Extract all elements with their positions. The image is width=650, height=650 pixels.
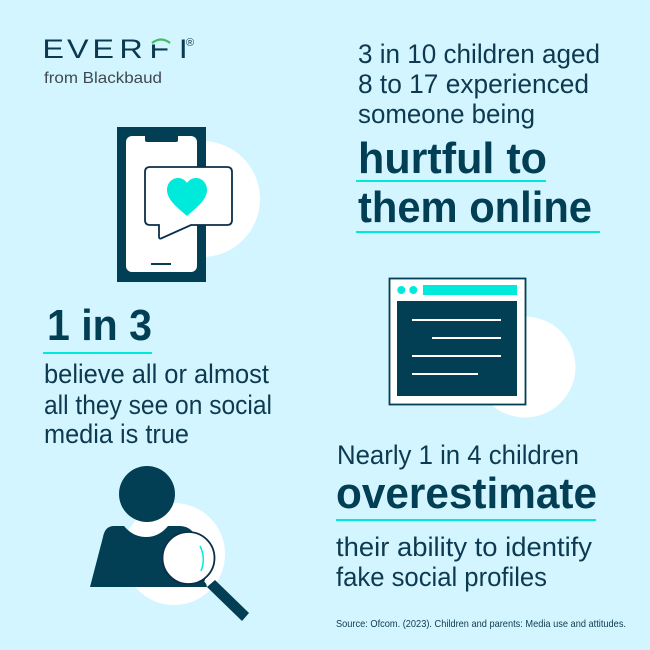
logo: EVERFI from Blackbaud: from Blackbaud: [44, 70, 162, 87]
text block: hurtful online statistic: hurtful to: [358, 134, 547, 183]
text block: hurtful online statistic: 3 in 10 children aged: [358, 39, 600, 69]
text block: 1 in 3 statistic: [43, 301, 272, 449]
logo: EVERFI from Blackbaud: EVERFI: [42, 34, 188, 64]
text block: 1 in 3 statistic: all they see on social: [44, 390, 272, 420]
text block: 1 in 3 statistic: media is true: [44, 419, 189, 449]
icon: person with magnifying glass: [90, 466, 249, 621]
text block: overestimate statistic: [336, 440, 597, 592]
text block: 1 in 3 statistic: 1 in 3: [47, 301, 152, 350]
text block: overestimate statistic: fake social profiles: [336, 562, 547, 592]
text block: 1 in 3 statistic: believe all or almost: [44, 359, 269, 389]
icon: browser window: [390, 278, 576, 418]
icon: phone with heart message: [117, 127, 260, 282]
text block: hurtful online statistic: them online: [358, 183, 592, 232]
logo: EVERFI from Blackbaud: [42, 34, 194, 87]
text block: overestimate statistic: Nearly 1 in 4 children: [337, 440, 579, 470]
text block: hurtful online statistic: someone being: [358, 99, 535, 129]
logo: EVERFI from Blackbaud: ®: [186, 37, 194, 49]
text block: overestimate statistic: overestimate: [336, 469, 597, 518]
text block: hurtful online statistic: [356, 39, 600, 233]
text block: hurtful online statistic: 8 to 17 experienced: [358, 69, 589, 99]
text block: overestimate statistic: their ability to identify: [336, 532, 593, 562]
